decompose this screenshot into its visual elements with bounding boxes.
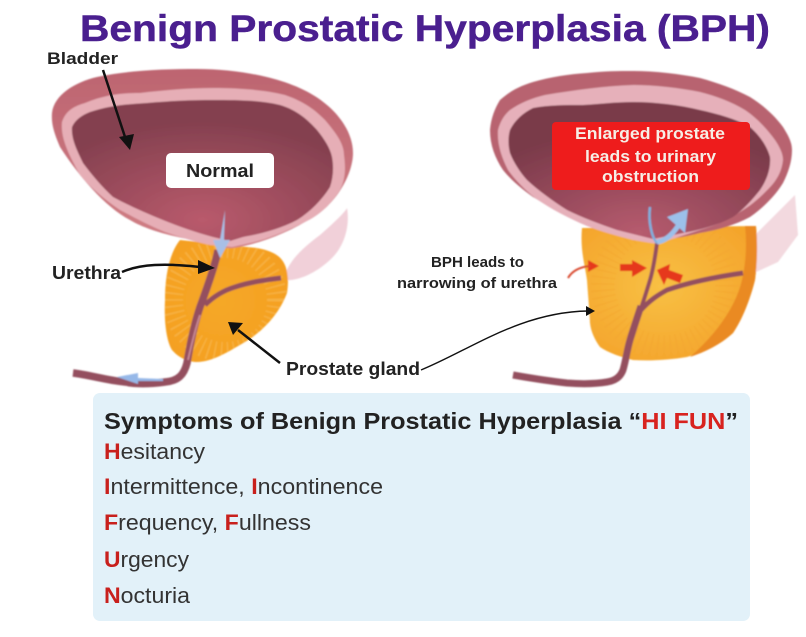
diagram: normal prostate [52, 69, 353, 384]
bladder [52, 69, 353, 248]
prostate gland [582, 223, 757, 360]
flow arrow: out [117, 373, 163, 384]
label: normal [166, 153, 274, 188]
urethra [73, 250, 281, 384]
label: red callout: Enlarged prostate [575, 124, 725, 143]
label: prostate gland [228, 306, 595, 379]
title: Benign Prostatic Hyperplasia (BPH) [80, 8, 770, 49]
panel heading: Symptoms of Benign Prostatic Hyperplasia “ HI FUN ” [104, 408, 738, 434]
symptom list: Intermittence, Incontinence [104, 474, 383, 499]
symptom list: Hesitancy [104, 439, 205, 464]
symptom list [104, 439, 383, 608]
label: red callout: leads to urinary [585, 147, 717, 166]
label: normal: Normal [186, 161, 254, 181]
diagram: enlarged prostate [490, 71, 798, 384]
urethra [513, 243, 743, 384]
label: BPH narrowing: BPH leads to [431, 254, 524, 271]
label: bladder [47, 49, 134, 150]
label: prostate gland: Prostate gland [286, 359, 420, 379]
symptom list: Nocturia [104, 583, 191, 608]
flow arrow: down [213, 210, 230, 258]
compression arrows [568, 260, 683, 285]
bladder [490, 71, 792, 244]
label: urethra [52, 260, 215, 283]
symptom list: Urgency [104, 547, 189, 572]
label: red callout [552, 122, 750, 190]
panel: symptoms [93, 393, 750, 621]
label: BPH narrowing: narrowing of urethra [397, 275, 558, 292]
symptom list: Frequency, Fullness [104, 510, 311, 535]
prostate gland [165, 240, 288, 362]
flow arrow: up [649, 207, 688, 243]
label: urethra: Urethra [52, 263, 122, 283]
seminal vesicle [743, 195, 798, 278]
seminal vesicle [283, 208, 348, 280]
label: red callout: obstruction [602, 167, 699, 186]
label: bladder: Bladder [47, 49, 118, 68]
label: BPH narrowing [397, 254, 558, 292]
